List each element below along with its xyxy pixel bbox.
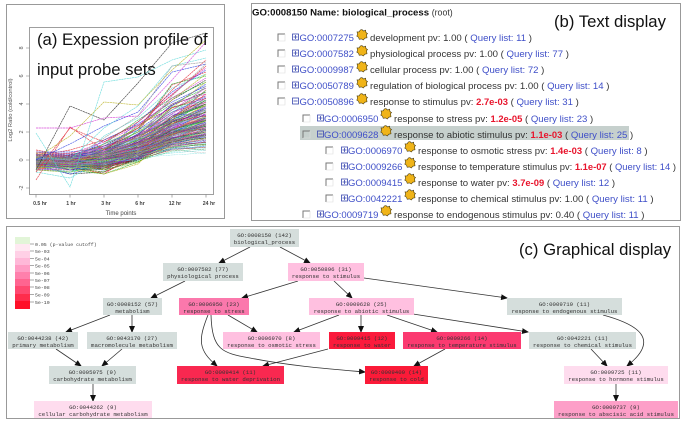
legend: p-value colour scale: 0.05 (p-value cutoff) [35,242,97,248]
legend: p-value colour scale: 5e-03 [35,249,50,255]
node: response to abiotic stimulus: response to abiotic stimulus [314,308,409,315]
node: response to osmotic stress [223,332,320,349]
node: response to endogenous stimulus: response to endogenous stimulus [512,308,617,315]
text rows: GO term tree: 1.1e-07 ( Query list: 14 ) [575,161,676,172]
heading: panel c: (c) Graphical display [519,240,672,259]
node: carbohydrate metabolism [49,366,136,384]
node: metabolism: GO:0008152 (57) [107,301,158,308]
x axis labels: 3 hr [101,201,111,207]
text rows: GO term tree [278,30,676,221]
text rows: GO term tree: Query list: 72 ) [482,65,544,76]
node: response to hormone stimulus: response to hormone stimulus [568,376,664,383]
legend: p-value colour scale: 5e-08 [35,285,50,291]
x axis labels: Time points [106,211,136,217]
text rows: GO term tree: response to water pv: [418,178,512,189]
node: response to water deprivation [177,366,284,384]
y axis ticks and labels [8,46,30,190]
y axis ticks and labels: 2 [19,130,25,134]
line chart: log2 ratio over time [8,28,215,217]
node: response to temperature stimulus [403,332,521,349]
node: cellular carbohydrate metabolism: cellular carbohydrate metabolism [38,411,148,418]
y axis ticks and labels: 0 [19,158,25,162]
legend: p-value colour scale: 5e-06 [35,271,50,277]
node: biological_process: biological_process [234,239,295,246]
y axis ticks and labels: Log2 Ratio (cold/control) [8,78,14,142]
node: response to hormone stimulus: GO:0009725 (11) [590,369,642,376]
text rows: GO term tree: cellular process pv: 1.00 ( [370,65,482,76]
y axis ticks and labels: 4 [19,102,25,106]
y axis ticks and labels: -2 [19,186,25,190]
node: response to temperature stimulus: GO:0009266 (14) [436,335,488,342]
heading: panel b: (b) Text display [554,12,667,31]
node: response to chemical stimulus: GO:0042221 (11) [557,335,608,342]
node: response to osmotic stress: GO:0006970 (8) [248,335,295,342]
node: response to water [329,332,395,349]
text rows: GO term tree: development pv: 1.00 ( [370,33,470,44]
text rows: GO term tree: GO:0007582 [300,49,354,60]
node: macromolecule metabolism: GO:0043170 (27) [106,335,158,342]
node: response to stimulus: response to stimulus [292,273,360,280]
node: carbohydrate metabolism: GO:0005975 (9) [69,369,116,376]
text rows: GO term tree: GO:0009628 [324,130,378,141]
legend: p-value colour scale: 5e-04 [35,256,50,262]
node: response to water: response to water [333,342,391,349]
legend: p-value colour scale: 5e-05 [35,264,50,270]
text rows: GO term tree: GO:0006970 [348,146,402,157]
node: response to stimulus: GO:0050896 (31) [300,266,352,273]
node: response to abscisic acid stimulus: response to abscisic acid stimulus [558,411,674,418]
node: biological_process [230,229,299,247]
x axis labels: 12 hr [169,201,181,207]
node: metabolism: metabolism [115,308,150,315]
text rows: GO term tree: 1.2e-05 ( Query list: 23 ) [491,113,593,125]
node: response to hormone stimulus [564,366,668,384]
node: response to chemical stimulus [529,332,636,349]
node: cellular carbohydrate metabolism: GO:0044262 (9) [69,404,117,411]
text rows: GO term tree: GO:0050896 [300,97,354,108]
text rows: GO term tree: Query list: 14 ) [547,81,609,92]
legend: p-value colour scale: 5e-07 [35,278,50,284]
node: response to stimulus [288,263,364,281]
node: response to chemical stimulus: response to chemical stimulus [533,342,632,349]
node: macromolecule metabolism [87,332,177,349]
node: metabolism [103,298,162,315]
y axis ticks and labels: 8 [19,46,25,50]
legend: p-value colour scale: 5e-09 [35,292,50,298]
node: response to abscisic acid stimulus [554,401,678,418]
node: cellular carbohydrate metabolism [34,401,152,418]
x axis labels: 0.5 hr [33,201,47,207]
text rows: GO term tree: response to abiotic stimulus pv: [394,130,531,141]
node: response to osmotic stress: response to osmotic stress [227,342,316,349]
text rows: GO term tree: response to stimulus pv: [370,97,476,108]
node: physiological process: physiological process [167,273,239,280]
node: response to stress: response to stress [183,308,245,315]
text rows: GO term tree: Query list: 11 ) [583,210,644,221]
text rows: GO term tree: 3.7e-09 ( Query list: 12 ) [512,177,615,189]
text rows: GO term tree: GO:0042221 [348,194,402,205]
text rows: GO term tree: physiological process pv: 1.00 ( [370,49,507,60]
x axis labels: 24 hr [203,201,215,207]
text rows: GO term tree: GO:0009415 [348,178,402,189]
text rows: GO term tree: response to osmotic stress pv: [418,146,550,157]
heading: panel a: input probe sets [37,60,156,79]
node: response to cold: response to cold [369,376,424,383]
x axis labels [33,194,215,217]
text rows: GO term tree: Query list: 11 ) [470,33,532,44]
text rows: GO term tree: 2.7e-03 ( Query list: 31 ) [476,96,579,108]
heading: panel a: (a) Expession profile of [37,30,208,49]
highlighted row background [300,126,629,140]
text rows: GO term tree: GO:0006950 [324,114,378,125]
text rows: GO term tree: GO:0009987 [300,65,354,76]
legend: p-value colour scale [15,237,97,309]
text rows: GO term tree: regulation of biological process pv: 1.00 ( [370,81,547,92]
node: response to stress [179,298,249,315]
text rows: GO term tree: Query list: 11 ) [592,194,654,205]
panel: (a) expression profile [6,4,224,218]
panel: (c) graphical display [6,226,680,418]
text rows: GO term tree: GO:0009719 [324,210,378,221]
text rows: GO term tree: GO:0009266 [348,162,402,173]
y axis ticks and labels: 6 [19,74,25,78]
panel: (b) text display [252,4,680,221]
node: response to abiotic stimulus: GO:0009628 (25) [336,301,387,308]
node: physiological process: GO:0007582 (77) [177,266,229,273]
legend: p-value colour scale: 5e-10 [35,300,50,306]
text rows: GO term tree: Query list: 77 ) [507,49,569,60]
node: macromolecule metabolism: macromolecule metabolism [91,342,174,349]
node: response to temperature stimulus: response to temperature stimulus [407,342,517,349]
node: response to abscisic acid stimulus: GO:0009737 (9) [592,404,640,411]
graph edges [56,247,644,401]
text rows: GO term tree: 1.1e-03 ( Query list: 25 ) [531,129,633,141]
text rows: GO term tree: 1.4e-03 ( Query list: 8 ) [550,145,648,157]
node: response to endogenous stimulus [507,298,622,315]
node: biological_process: GO:0008150 (142) [237,232,292,239]
node: primary metabolism: GO:0044238 (42) [17,335,69,342]
node: response to water: GO:0009415 (12) [336,335,388,342]
x axis labels: 1 hr [66,201,76,207]
node: response to endogenous stimulus: GO:0009719 (11) [539,301,590,308]
node: response to water deprivation: response to water deprivation [181,376,280,383]
node: response to water deprivation: GO:0009414 (11) [205,369,256,376]
node: response to cold: GO:0009409 (14) [371,369,422,376]
text rows: GO term tree: GO:0050789 [300,81,354,92]
node: primary metabolism [8,332,78,349]
node: physiological process [163,263,243,281]
text rows: GO term tree: response to endogenous stimulus pv: 0.40 ( [394,210,583,221]
node: carbohydrate metabolism: carbohydrate metabolism [53,376,132,383]
text rows: GO term tree: response to temperature stimulus pv: [418,161,575,172]
node: response to abiotic stimulus [309,298,414,315]
node: response to stress: GO:0006950 (23) [188,301,240,308]
node: response to cold [365,366,428,384]
x axis labels: 6 hr [135,201,145,207]
text rows: GO term tree: response to stress pv: [394,114,491,125]
tree root header: GO:0008150 Name: biological_process (root) [252,8,453,18]
text rows: GO term tree: GO:0007275 [300,33,354,44]
text rows: GO term tree: response to chemical stimulus pv: 1.00 ( [418,194,592,205]
node: primary metabolism: primary metabolism [12,342,74,349]
